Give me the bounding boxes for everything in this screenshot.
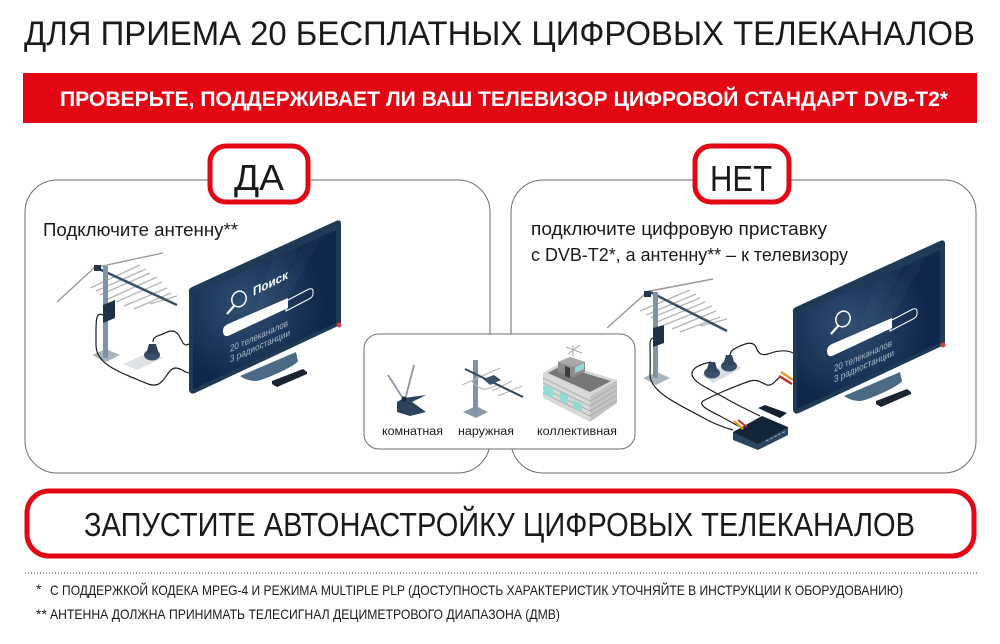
no instruction <box>531 219 848 265</box>
no badge: НЕТ <box>710 158 772 199</box>
search icon right <box>831 309 853 334</box>
red banner <box>23 73 977 123</box>
channels text right: 20 телеканалов <box>834 338 892 375</box>
red banner: ПРОВЕРЬТЕ, ПОДДЕРЖИВАЕТ ЛИ ВАШ ТЕЛЕВИЗОР ЦИФРОВОЙ СТАНДАРТ DVB-T2* <box>60 87 949 111</box>
search label: Поиск <box>253 267 288 299</box>
remote right <box>876 389 911 407</box>
icon: outdoor antenna left <box>57 253 189 385</box>
autotune callout <box>27 491 974 556</box>
progress bar <box>223 289 313 336</box>
no instruction: подключите цифровую приставку <box>531 219 827 239</box>
icon: indoor antenna <box>388 365 426 416</box>
yes instruction: Подключите антенну** <box>43 220 238 240</box>
no badge <box>695 146 789 202</box>
icon: outdoor antenna small <box>462 360 523 418</box>
TV stand <box>240 352 298 381</box>
icon: wall socket and plug left <box>123 331 189 370</box>
footnotes: ** <box>36 606 47 622</box>
footnotes: * <box>36 581 42 597</box>
panel: no <box>511 146 976 473</box>
footnotes: АНТЕННА ДОЛЖНА ПРИНИМАТЬ ТЕЛЕСИГНАЛ ДЕЦИМЕТРОВОГО ДИАПАЗОНА (ДМВ) <box>50 606 560 622</box>
icon: TV left: 3 радиостанции <box>230 328 290 365</box>
panel: yes <box>25 146 490 473</box>
footnotes <box>36 581 903 622</box>
yes badge: ДА <box>234 157 284 198</box>
panel: antenna types <box>364 334 635 449</box>
progress bar right <box>827 309 917 356</box>
icon: TV right <box>793 240 946 414</box>
text: collective label: коллективная <box>537 426 617 438</box>
channels text: 20 телеканалов <box>230 318 288 355</box>
yes badge <box>210 146 308 202</box>
TV stand right <box>844 372 902 401</box>
icon: set-top box <box>733 405 788 450</box>
icon: apartment building <box>543 345 617 422</box>
text: indoor label: комнатная <box>382 426 443 438</box>
text: outdoor label: наружная <box>458 426 514 438</box>
remote <box>272 369 307 387</box>
title: ДЛЯ ПРИЕМА 20 БЕСПЛАТНЫХ ЦИФРОВЫХ ТЕЛЕКАНАЛОВ <box>24 15 975 53</box>
autotune callout: ЗАПУСТИТЕ АВТОНАСТРОЙКУ ЦИФРОВЫХ ТЕЛЕКАНАЛОВ <box>84 506 915 543</box>
icon: TV left <box>189 220 342 394</box>
no instruction: с DVB-T2*, а антенну** – к телевизору <box>531 245 848 265</box>
search icon <box>227 289 249 314</box>
icon: outdoor antenna right <box>607 279 733 430</box>
icon: TV right: 3 радиостанции <box>834 348 894 385</box>
icon: double socket and cables <box>692 343 793 427</box>
